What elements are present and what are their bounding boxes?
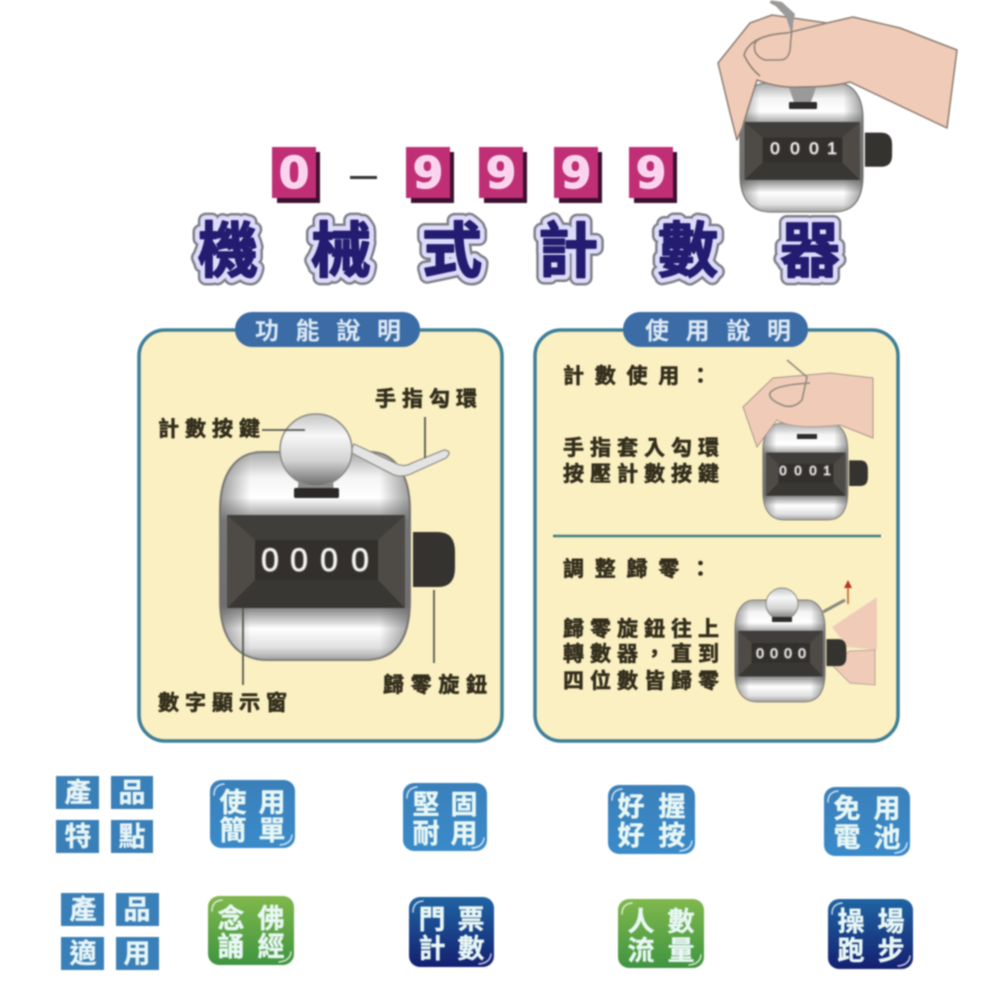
divider (553, 535, 881, 537)
title range: 0-9999: 9 (561, 148, 591, 199)
badge: no battery needed: 池 (874, 823, 900, 853)
badge: track running (828, 899, 913, 969)
icon: fingers turning reset knob: 0 (784, 645, 792, 661)
icon: hand pressing counter (743, 360, 873, 520)
badge: no battery needed: 免 (834, 794, 860, 824)
badge: no battery needed: 用 (874, 794, 900, 824)
badge: ticket counting (409, 897, 494, 967)
badge: easy to use (210, 780, 295, 848)
icon: hand pressing counter: 0 (779, 463, 787, 478)
panel: usage instructions (535, 312, 898, 741)
title: mechanical counter: 數 (658, 218, 718, 285)
badge: sturdy and durable: 用 (450, 819, 478, 849)
large tally counter diagram: 0 (320, 542, 338, 578)
badge: track running: 步 (878, 936, 904, 966)
tag: product features: 點 (118, 822, 146, 852)
text: reset to zero: 調整歸零： (563, 558, 711, 581)
heading pill: usage instructions: 使用說明 (645, 318, 791, 345)
text: counting use: 按壓計數按鍵 (563, 462, 719, 486)
badge: easy to use: 用 (258, 788, 286, 818)
badge: ticket counting: 門 (418, 905, 446, 935)
title: mechanical counter: 器 (780, 218, 840, 285)
badge: people flow: 數 (668, 907, 694, 937)
icon: hand pressing tally counter (718, 0, 957, 212)
icon: hand pressing counter: 0 (794, 463, 802, 478)
badge: sturdy and durable (403, 783, 487, 851)
badge: people flow (618, 899, 704, 968)
arrow: turn upward (844, 580, 852, 604)
badge: sturdy and durable: 耐 (412, 819, 440, 849)
icon: hand pressing tally counter: 0 (809, 139, 819, 158)
title range: 0-9999: 0 (279, 148, 309, 199)
title range: 0-9999: 9 (486, 148, 516, 199)
title: mechanical counter: 計 (538, 218, 598, 285)
badge: people flow: 量 (668, 936, 694, 966)
title range: 0-9999: 9 (636, 148, 666, 199)
text: reset to zero: 四位數皆歸零 (563, 669, 719, 693)
badge: people flow: 流 (628, 936, 654, 966)
title: mechanical counter (198, 218, 840, 285)
badge: ticket counting: 計 (418, 934, 446, 964)
text: reset to zero: 轉數器，直到 (563, 643, 719, 666)
panel: function description (139, 312, 502, 741)
heading pill: usage instructions (623, 312, 808, 347)
title: mechanical counter: 械 (311, 218, 371, 285)
text: counting use (563, 365, 719, 486)
badge: easy to grip and press: 好 (618, 792, 644, 822)
text: reset to zero (563, 558, 719, 693)
badge: chanting: 佛 (258, 904, 284, 934)
large tally counter diagram: 0 (290, 542, 308, 578)
icon: hand pressing tally counter: 0 (790, 139, 800, 158)
label: count button: 計數按鍵 (158, 417, 260, 441)
title: mechanical counter: 器 (780, 218, 840, 285)
badge: sturdy and durable: 堅 (412, 790, 440, 820)
label: digit window: 數字顯示窗 (158, 691, 287, 715)
text: counting use: 手指套入勾環 (563, 437, 719, 460)
tag: product features: 產 (64, 778, 92, 808)
badge: easy to grip and press: 按 (658, 821, 686, 851)
badge: easy to grip and press: 好 (618, 821, 644, 851)
badge: easy to grip and press: 握 (658, 792, 686, 822)
title: mechanical counter: 械 (311, 218, 371, 285)
leader line: finger hook ring (424, 417, 426, 458)
tag: product features: 品 (118, 778, 146, 808)
text: reset to zero: 歸零旋鈕往上 (563, 618, 719, 641)
title: mechanical counter: 機 (198, 218, 258, 285)
badge: easy to use: 簡 (220, 816, 246, 846)
tag: product applications: 適 (70, 939, 96, 969)
badge: easy to use: 使 (220, 788, 246, 818)
badge: ticket counting: 數 (458, 934, 484, 964)
icon: hand pressing counter: 0 (809, 463, 817, 478)
badge: easy to use: 單 (258, 816, 286, 846)
label: finger hook ring: 手指勾環 (375, 388, 477, 411)
badge: no battery needed (824, 787, 910, 856)
badge: people flow: 人 (628, 907, 654, 937)
heading pill: function description (235, 312, 420, 347)
badge: track running: 操 (838, 907, 864, 937)
icon: fingers turning reset knob: 0 (756, 645, 764, 661)
title: mechanical counter: 機 (198, 218, 258, 285)
title: mechanical counter: 式 (422, 218, 482, 285)
tag: product applications: 品 (124, 895, 150, 925)
leader line: digit window (242, 608, 244, 685)
title: mechanical counter: 計 (538, 218, 598, 285)
icon: fingers turning reset knob: 0 (798, 645, 806, 661)
icon: fingers turning reset knob: 0 (770, 645, 778, 661)
badge: chanting: 誦 (218, 932, 244, 962)
tag: product applications: 產 (70, 895, 96, 925)
tag: product features (56, 776, 153, 853)
tag: product applications (61, 893, 159, 970)
title: mechanical counter: 數 (658, 218, 718, 285)
badge: track running: 場 (878, 907, 904, 937)
badge: sturdy and durable: 固 (450, 790, 478, 820)
icon: fingers turning reset knob (735, 580, 877, 702)
title: mechanical counter: 機 (198, 218, 258, 285)
badge: chanting: 念 (218, 903, 244, 934)
badge: track running: 跑 (838, 936, 864, 966)
icon: hand pressing tally counter: 1 (827, 139, 837, 158)
heading pill: function description: 功能說明 (255, 318, 401, 345)
label: reset knob: 歸零旋鈕 (383, 674, 487, 697)
title: mechanical counter: 計 (538, 218, 598, 285)
title: mechanical counter: 器 (780, 218, 840, 285)
title: mechanical counter: 數 (658, 218, 718, 285)
text: counting use: 計數使用： (563, 365, 711, 388)
title: mechanical counter: 式 (422, 218, 482, 285)
leader line: reset knob (433, 590, 435, 663)
large tally counter diagram (220, 414, 455, 660)
title range: 0-9999 (272, 147, 677, 203)
large tally counter diagram: 0 (351, 542, 369, 578)
icon: hand pressing counter: 1 (823, 463, 831, 478)
leader line: count button (262, 429, 305, 431)
badge: ticket counting: 票 (458, 905, 484, 935)
title range: 0-9999: 9 (413, 148, 443, 199)
badge: easy to grip and press (608, 785, 695, 854)
badge: chanting (208, 896, 294, 965)
badge: no battery needed: 電 (834, 823, 860, 853)
title: mechanical counter: 械 (311, 218, 371, 285)
tag: product features: 特 (64, 822, 92, 852)
badge: chanting: 經 (258, 932, 284, 962)
tag: product applications: 用 (124, 939, 150, 969)
title: mechanical counter: 式 (422, 218, 482, 285)
large tally counter diagram: 0 (261, 542, 279, 578)
icon: hand pressing tally counter: 0 (770, 139, 780, 158)
